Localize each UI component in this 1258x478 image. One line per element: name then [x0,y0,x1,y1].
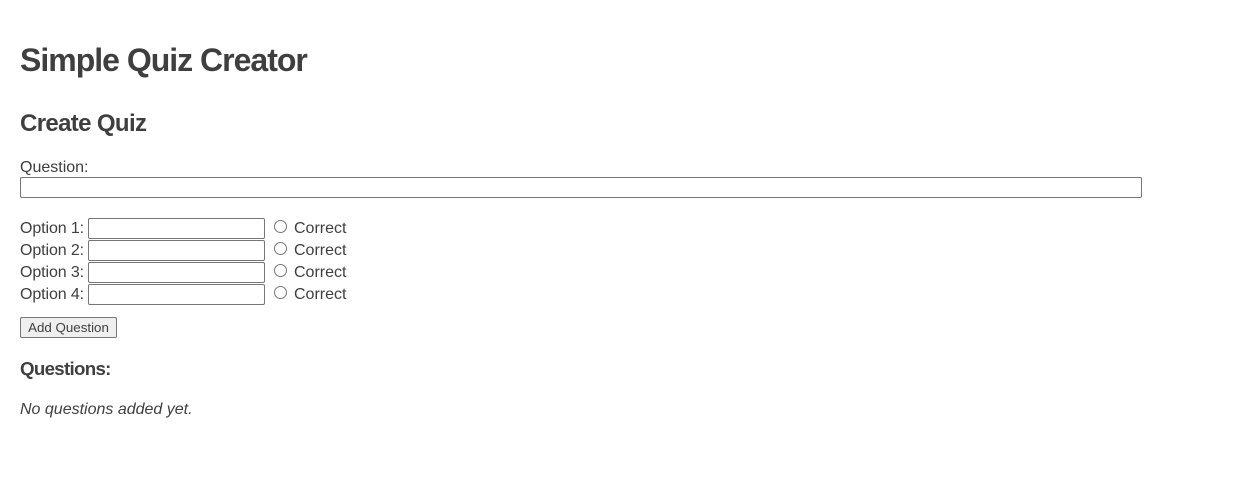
option row 4 [20,284,346,305]
label: option 3: Option 3: [20,264,84,281]
option row 3 [20,262,346,283]
heading: questions: Questions: [20,358,111,379]
option row 1 [20,218,346,239]
radio: option 2 [274,242,287,255]
title: Simple Quiz Creator [20,42,307,78]
label: option 2: Option 2: [20,242,84,259]
label: option 4: Option 4: [20,286,84,303]
input: question [20,177,1142,198]
button: add question: Add Question [28,320,109,335]
radio: option 1 [274,220,287,233]
input: option 4 [88,284,265,305]
radio: option 3 [274,264,287,277]
label: correct 1: Correct [294,220,346,237]
button: add question [20,317,117,338]
empty state text: No questions added yet. [20,401,193,418]
input: option 3 [88,262,265,283]
label: question: Question: [20,159,88,176]
label: correct 4: Correct [294,286,346,303]
label: option 1: Option 1: [20,220,84,237]
option row 2 [20,240,346,261]
input: option 1 [88,218,265,239]
input: option 2 [88,240,265,261]
heading: create quiz: Create Quiz [20,110,146,137]
label: correct 3: Correct [294,264,346,281]
radio: option 4 [274,286,287,299]
label: correct 2: Correct [294,242,346,259]
